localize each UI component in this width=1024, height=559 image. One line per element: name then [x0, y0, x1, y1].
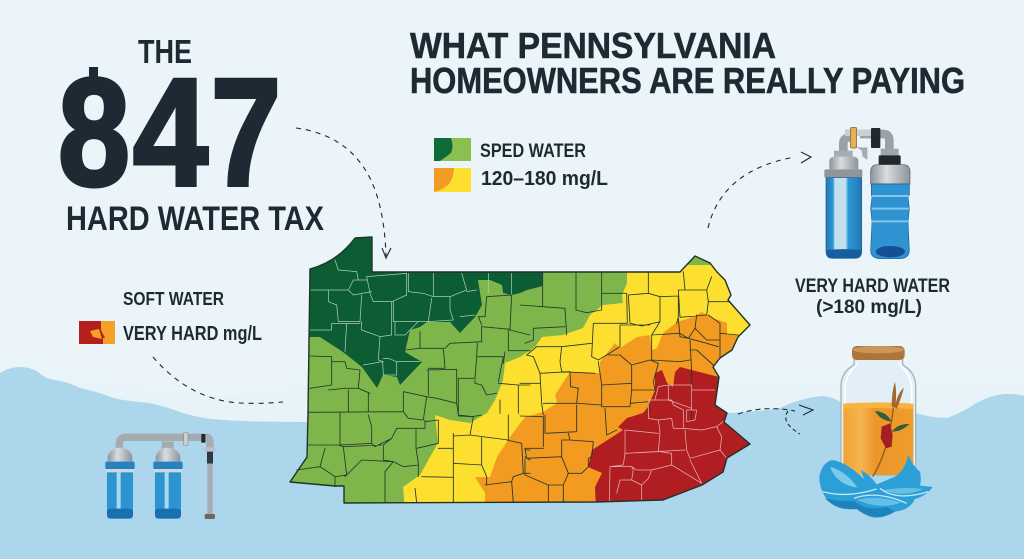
- icon: jar with coffee and water: [819, 346, 933, 518]
- botanical sprig: [873, 382, 909, 477]
- top pipe: [119, 432, 210, 450]
- left cartridge: [824, 151, 862, 258]
- icon: top right filter bottles: [824, 127, 910, 259]
- cork lid: [852, 346, 905, 360]
- heading: what pennsylvania homeowners are really paying: [410, 25, 965, 101]
- water splash: [819, 455, 933, 518]
- legend: top: [434, 138, 608, 192]
- zone: light green: [291, 256, 711, 502]
- right cartridge: [871, 149, 910, 259]
- big number: $847: [58, 47, 281, 218]
- county lines: west: [297, 260, 530, 503]
- glass jar: [841, 358, 916, 475]
- map zones: [291, 238, 749, 502]
- zone: red: [588, 367, 749, 502]
- zone: orange: [475, 312, 739, 502]
- subtitle: hard water tax: HARD WATER TAX: [66, 200, 324, 238]
- amber liquid: [843, 403, 913, 475]
- icon: bottom left filter system: [105, 432, 215, 519]
- right label: very hard water: VERY HARD WATER: [795, 276, 950, 297]
- arrow: to top filter: [708, 152, 811, 228]
- legend label: 120-180 mg/L: 120–180 mg/L: [481, 167, 608, 190]
- county lines: east: [520, 272, 738, 502]
- right label: very hard water: [795, 276, 950, 318]
- standing pipe: [204, 447, 215, 519]
- arrow: title to map: [296, 128, 391, 258]
- big number: $847: 4: [133, 47, 208, 218]
- map: pennsylvania water hardness by county: [280, 230, 770, 510]
- background water wave: [0, 367, 1024, 559]
- background pale wave: [0, 350, 1024, 559]
- zone: dark green: [300, 230, 543, 388]
- big number: $847: 7: [211, 47, 281, 218]
- cartridge right: [153, 442, 183, 519]
- arrow: soft water curve: [153, 357, 283, 403]
- legend label: very hard mg/L: VERY HARD mg/L: [123, 323, 262, 345]
- inner glass line: [845, 363, 912, 404]
- right label: very hard water: (>180 mg/L): [816, 297, 922, 318]
- swatch: yellow orange: [434, 168, 471, 192]
- swatch: green: [434, 138, 471, 161]
- big number: $847: 8: [58, 47, 130, 218]
- liquid surface: [843, 403, 913, 409]
- swatch: red orange: [79, 321, 115, 344]
- title word: the: THE: [138, 33, 192, 70]
- title: the $847 hard water tax: [58, 33, 324, 238]
- pipework: [843, 127, 889, 160]
- zone: yellow: [403, 265, 770, 510]
- state outline: [290, 237, 750, 503]
- cartridge left: [105, 448, 135, 519]
- arrow: to jar: [738, 405, 813, 434]
- legend: left: [79, 289, 262, 345]
- legend label: soft water: SOFT WATER: [123, 289, 224, 309]
- legend label: sped water: SPED WATER: [480, 140, 586, 162]
- heading: what pennsylvania homeowners are really paying: WHAT PENNSYLVANIA: [410, 25, 776, 66]
